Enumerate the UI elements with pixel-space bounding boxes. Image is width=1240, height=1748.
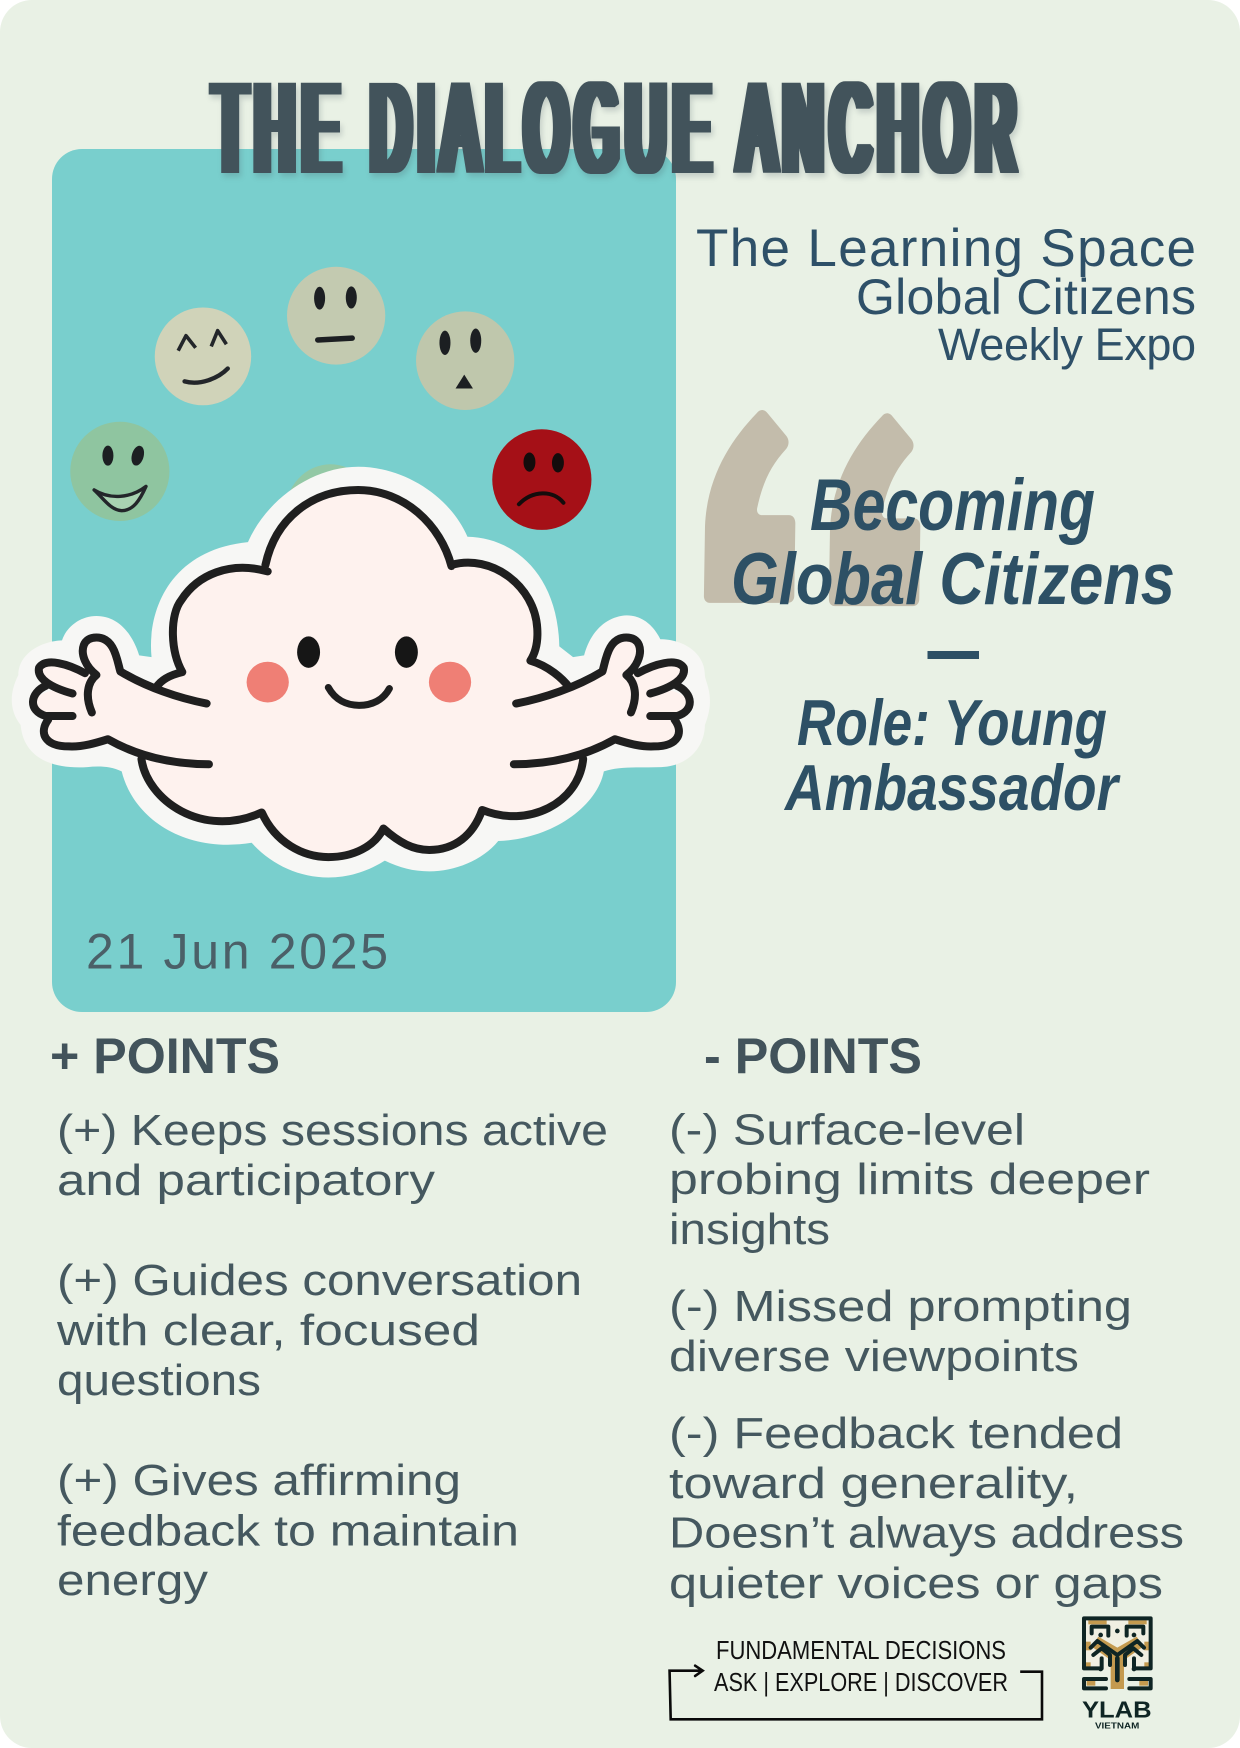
footer motto xyxy=(714,1635,1008,1697)
cloud smile xyxy=(328,687,389,705)
left arm fill xyxy=(34,637,209,764)
minus point 1: insights xyxy=(669,1205,830,1254)
cloud sticker outline xyxy=(12,467,710,877)
right arm fill xyxy=(514,637,689,764)
quote heading: Becoming Global Citizens xyxy=(731,465,1175,620)
cloud left cheek xyxy=(247,662,289,702)
plus point 3: (+) Gives affirming xyxy=(57,1456,461,1505)
plus point list xyxy=(56,1106,608,1605)
icon: YLAB logo: VIETNAM xyxy=(1095,1720,1139,1730)
minus point 2: diverse viewpoints xyxy=(669,1332,1079,1381)
plus point 3: feedback to maintain xyxy=(57,1506,519,1556)
icon: neutral face xyxy=(287,267,385,365)
minus point list xyxy=(669,1106,1184,1608)
role text: Role: Young xyxy=(797,686,1107,759)
subheading block: Weekly Expo xyxy=(938,319,1196,370)
subheading block xyxy=(696,219,1196,370)
plus point 3: energy xyxy=(57,1556,208,1605)
icon: cloud mascot xyxy=(12,467,710,877)
role text xyxy=(783,686,1121,824)
plus point 2: questions xyxy=(57,1356,261,1405)
cloud body fill xyxy=(141,490,583,857)
quote heading: Becoming Global Citizens: Becoming xyxy=(810,465,1095,546)
icon: hidden red face xyxy=(331,479,432,579)
plus point 1 xyxy=(57,1106,608,1205)
subheading block: Global Citizens xyxy=(856,269,1196,325)
cloud outline strokes xyxy=(33,490,690,857)
plus point 2: with clear, focused xyxy=(56,1306,480,1355)
subheading block: The Learning Space xyxy=(696,219,1196,278)
cloud right eye xyxy=(395,636,418,668)
plus point 3 xyxy=(57,1456,519,1605)
minus point 3: (-) Feedback tended xyxy=(669,1409,1123,1458)
icon: surprised face xyxy=(416,311,514,410)
plus point 2: (+) Guides conversation xyxy=(57,1256,582,1305)
icon: YLAB logo: YLAB xyxy=(1082,1697,1152,1723)
arrow: feedback loop xyxy=(670,1666,1042,1719)
heading: plus points: + POINTS xyxy=(50,1028,280,1084)
date: 21 Jun 2025 xyxy=(86,924,388,980)
role text: Ambassador xyxy=(783,751,1121,824)
plus point 1: and participatory xyxy=(57,1156,435,1205)
icon: quotation mark xyxy=(704,410,920,606)
icon: green smiling face xyxy=(70,422,169,521)
icon: happy beige face xyxy=(155,307,251,405)
plus point 2 xyxy=(56,1256,582,1405)
heading: minus points: - POINTS xyxy=(704,1028,922,1084)
minus point 2 xyxy=(669,1282,1132,1381)
minus point 3: quieter voices or gaps xyxy=(669,1559,1163,1608)
minus point 2: (-) Missed prompting xyxy=(669,1282,1132,1331)
emotion faces xyxy=(70,267,591,579)
minus point 1: (-) Surface-level xyxy=(669,1106,1025,1154)
panel: teal image panel xyxy=(52,149,676,1012)
minus point 3: toward generality, xyxy=(669,1459,1078,1508)
minus point 1: probing limits deeper xyxy=(669,1155,1150,1204)
icon: red sad face xyxy=(492,429,591,530)
footer motto: FUNDAMENTAL DECISIONS xyxy=(716,1635,1006,1665)
quote dash xyxy=(928,651,979,659)
minus point 3: Doesn’t always address xyxy=(669,1508,1184,1558)
plus point 1: (+) Keeps sessions active xyxy=(57,1106,608,1155)
icon: YLAB logo xyxy=(1082,1618,1152,1730)
minus point 3 xyxy=(669,1409,1184,1608)
icon: hidden green face xyxy=(285,464,377,564)
cloud left eye xyxy=(297,636,320,668)
cloud right cheek xyxy=(429,662,471,702)
minus point 1 xyxy=(669,1106,1150,1254)
footer motto: ASK | EXPLORE | DISCOVER xyxy=(714,1667,1008,1697)
